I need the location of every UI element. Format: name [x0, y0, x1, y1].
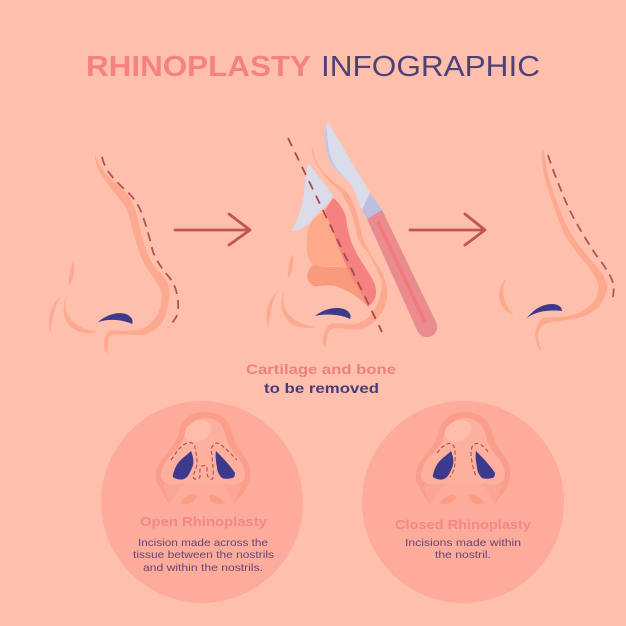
closed rhinoplasty description: Incisions made within — [405, 537, 521, 549]
right nostril — [476, 451, 495, 479]
lower crescents — [440, 495, 485, 504]
nostril wing — [499, 280, 513, 315]
lower crescents — [180, 495, 225, 504]
panel: closed rhinoplasty — [362, 401, 564, 603]
open rhinoplasty description: and within the nostrils. — [143, 562, 263, 574]
blade — [325, 122, 370, 210]
lower tissue — [307, 265, 368, 307]
arrow 1 — [175, 214, 250, 245]
nose after surgery — [499, 150, 614, 350]
handle — [367, 210, 437, 337]
nostril — [98, 313, 133, 324]
bone to remove — [292, 164, 333, 231]
panel: open rhinoplasty — [101, 401, 303, 603]
incision dashes — [437, 443, 488, 477]
cartilage layer — [325, 198, 376, 307]
nose outer shape — [416, 412, 510, 504]
title: RHINOPLASTY — [86, 51, 311, 83]
title: INFOGRAPHIC — [321, 51, 540, 83]
caption: cartilage and bone — [246, 362, 397, 396]
nose inner skin — [161, 418, 245, 485]
blade shadow — [325, 126, 352, 186]
collar — [362, 193, 382, 219]
incision dashes — [171, 443, 237, 479]
nose tip highlight — [181, 416, 215, 446]
handle inlay — [378, 222, 425, 322]
lower lobes — [424, 483, 502, 504]
nose outer shape — [156, 412, 250, 504]
dashed cut line — [288, 138, 382, 332]
nose inner skin — [421, 418, 505, 485]
closed rhinoplasty description: the nostril. — [435, 549, 491, 561]
upper tissue — [307, 210, 349, 268]
caption: cartilage and bone: Cartilage and bone — [246, 362, 397, 377]
caption: cartilage and bone: to be removed — [264, 381, 379, 396]
closed rhinoplasty description — [405, 537, 521, 561]
nostril wing — [49, 262, 97, 333]
panel background circle — [362, 401, 564, 603]
arrow 2 — [410, 214, 485, 245]
nostril wing — [267, 255, 315, 328]
scalpel — [325, 122, 437, 337]
nose during surgery — [267, 122, 437, 347]
nose tip highlight — [441, 416, 475, 446]
open rhinoplasty heading: Open Rhinoplasty — [140, 515, 267, 529]
nose outline — [536, 150, 607, 350]
right nostril — [216, 451, 235, 479]
lower lobes — [164, 483, 242, 504]
nose outline — [312, 147, 387, 347]
nose before surgery — [49, 155, 178, 353]
nose outline — [95, 155, 169, 353]
open rhinoplasty description — [133, 537, 274, 574]
title — [86, 51, 540, 83]
left nostril — [173, 451, 193, 480]
open rhinoplasty description: tissue between the nostrils — [133, 549, 274, 561]
left nostril — [433, 451, 453, 480]
nostril — [315, 308, 351, 319]
open rhinoplasty description: Incision made across the — [138, 537, 268, 549]
dashed target profile — [548, 155, 614, 297]
closed rhinoplasty heading: Closed Rhinoplasty — [395, 518, 531, 532]
front nose closed — [416, 412, 510, 504]
nostril — [527, 304, 562, 318]
panel background circle — [101, 401, 303, 603]
front nose open — [156, 412, 250, 504]
dashed target profile — [102, 157, 178, 327]
